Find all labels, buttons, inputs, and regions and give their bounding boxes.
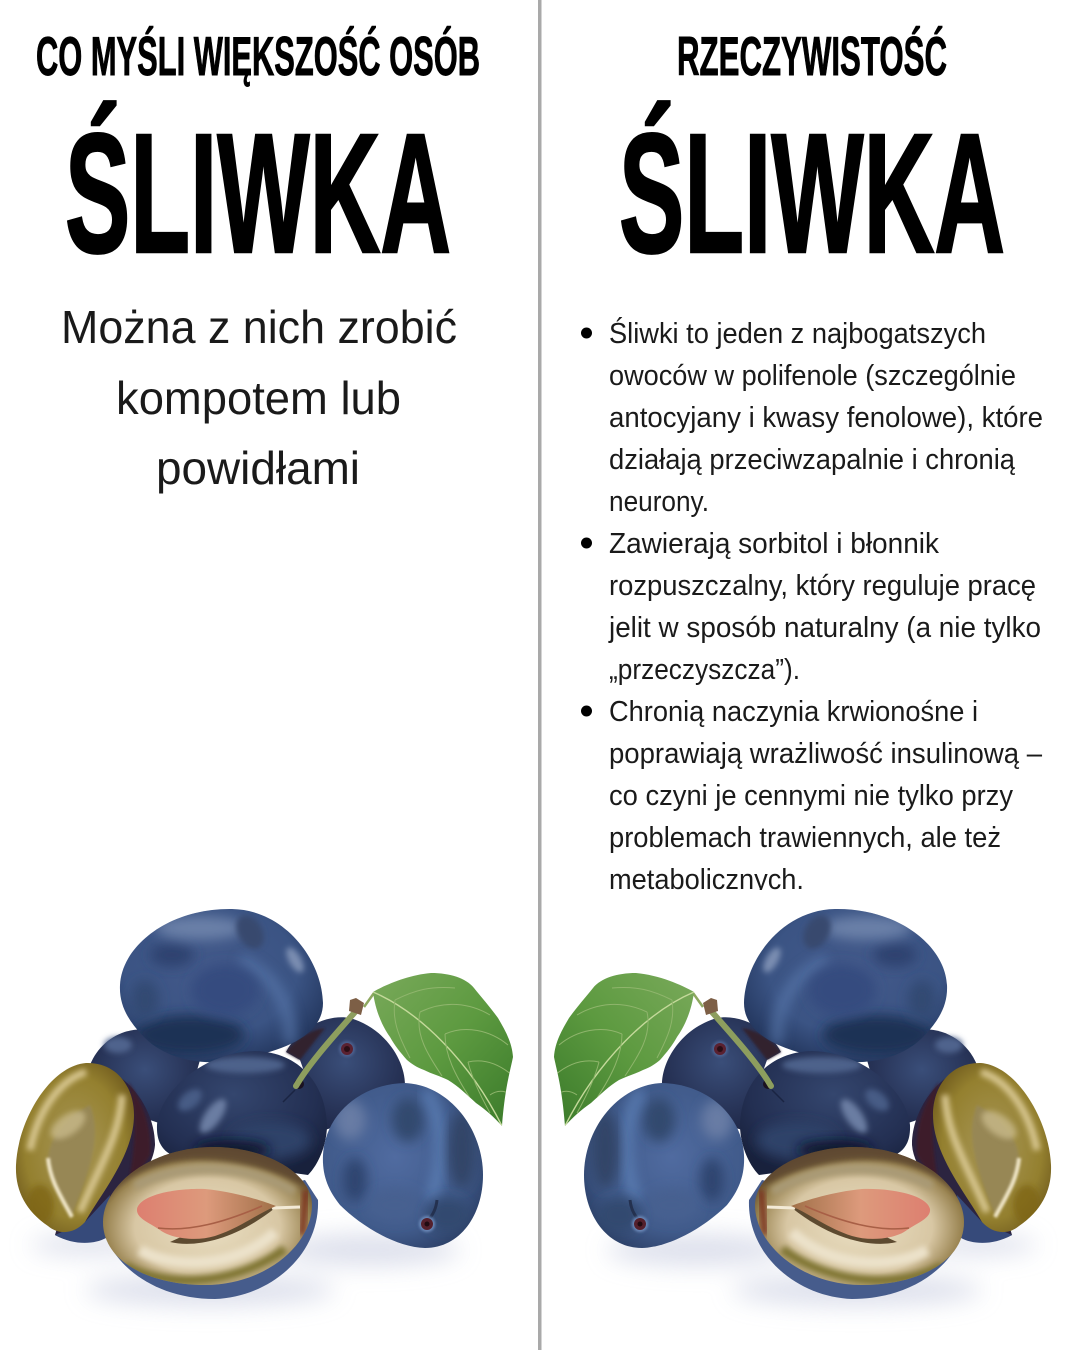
right bullet list — [581, 316, 1043, 896]
vertical divider — [538, 0, 542, 1350]
bullet three: co czyni je cennymi nie tylko przy — [609, 780, 1013, 812]
bullet three — [581, 696, 1043, 896]
cut plum flesh left — [16, 1063, 134, 1232]
bullet three: Chronią naczynia krwionośne i — [609, 696, 978, 728]
plums illustration right (mirrored) — [554, 909, 1051, 1306]
left title: ŚLIWKA — [65, 99, 451, 289]
ground shadow — [30, 1234, 460, 1306]
left text block: Można z nich zrobić — [61, 301, 457, 353]
middle plum — [157, 1051, 327, 1175]
bullet one: neurony. — [609, 486, 709, 518]
top plum — [120, 909, 323, 1062]
stem — [296, 993, 374, 1086]
bullet one: owoców w polifenole (szczególnie — [609, 360, 1016, 392]
bullet one: antocyjany i kwasy fenolowe), które — [609, 402, 1043, 434]
left text block — [61, 301, 457, 494]
bullet one: Śliwki to jeden z najbogatszych — [609, 316, 986, 350]
bullet two: Zawierają sorbitol i błonnik — [609, 528, 939, 560]
back left plum — [90, 1029, 200, 1130]
leaf — [373, 973, 513, 1126]
bullet two — [581, 528, 1041, 686]
plums illustration left — [16, 909, 513, 1306]
plum stone — [137, 1189, 276, 1239]
bullet three: poprawiają wrażliwość insulinową – — [609, 738, 1043, 770]
bullet three: problemach trawiennych, ale też — [609, 822, 1001, 854]
left text block: kompotem lub — [116, 372, 401, 424]
left text block: powidłami — [156, 442, 360, 494]
cut plum skin left — [55, 1064, 155, 1240]
left column heading: CO MYŚLI WIĘKSZOŚĆ OSÓB — [36, 25, 480, 87]
bullet one — [581, 316, 1043, 518]
front half plum — [103, 1140, 318, 1299]
right plum — [323, 1083, 483, 1248]
bullet two: jelit w sposób naturalny (a nie tylko — [608, 612, 1041, 644]
bullet two: „przeczyszcza”). — [609, 654, 800, 686]
bullet two: rozpuszczalny, który reguluje pracę — [609, 570, 1036, 602]
bullet three: metabolicznych. — [609, 864, 804, 896]
back right plum — [286, 1017, 405, 1130]
bullet one: działają przeciwzapalnie i chronią — [609, 444, 1016, 476]
